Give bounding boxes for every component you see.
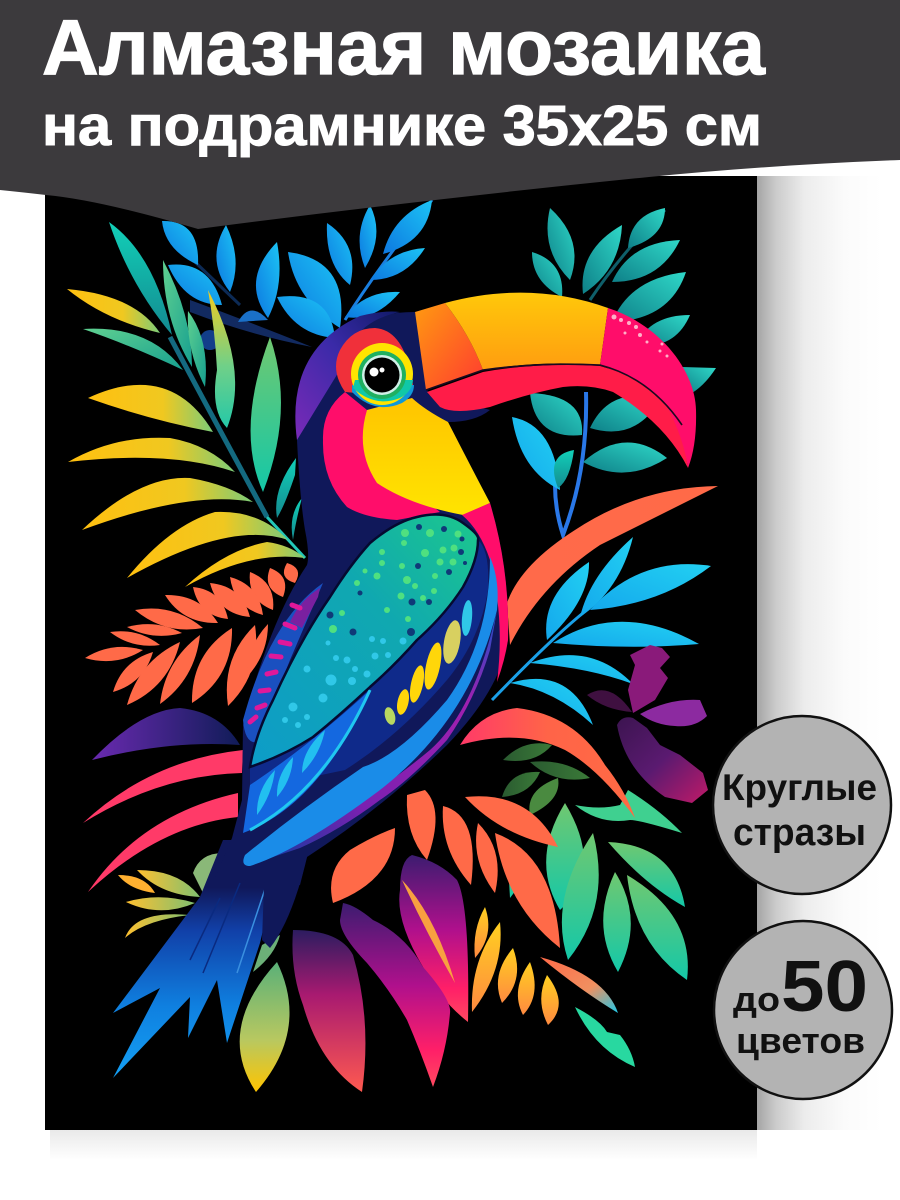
eye teal lower xyxy=(353,380,413,401)
tail slits xyxy=(190,883,267,973)
beak orange segment xyxy=(415,303,483,390)
dark magenta leaves right xyxy=(587,645,708,803)
subtitle: на подрамнике 35х25 см xyxy=(42,94,762,158)
beak yellow segment xyxy=(445,293,608,370)
eye pupil xyxy=(364,358,400,392)
beak xyxy=(415,293,696,468)
badge: up to 50 colours xyxy=(714,921,892,1099)
banner shape xyxy=(0,0,900,229)
yellow wing spots xyxy=(383,600,474,726)
beak dots xyxy=(612,314,668,358)
eye green ring xyxy=(358,351,406,399)
canvas black background xyxy=(45,176,757,1130)
badge text line 1: Круглые xyxy=(722,767,877,808)
lower wing feathers xyxy=(243,690,370,833)
blue frond right xyxy=(492,537,711,725)
top-left blue leaves xyxy=(162,200,432,350)
bird body xyxy=(215,312,508,885)
yellow chest xyxy=(363,398,490,515)
top-left tropical frond xyxy=(67,222,305,587)
head purple edge xyxy=(295,312,400,440)
title: Алмазная мозаика xyxy=(42,3,766,91)
teal wing xyxy=(250,515,478,767)
wing dots xyxy=(282,524,467,728)
tail dark piece xyxy=(262,857,307,948)
eye xyxy=(336,328,414,407)
badge: round rhinestones xyxy=(713,716,891,894)
lower mandible xyxy=(427,365,688,468)
pink collar xyxy=(323,392,440,520)
belly purple xyxy=(270,610,497,858)
badge text colours: цветов xyxy=(736,1020,865,1061)
toucan xyxy=(113,293,696,1078)
pink throat xyxy=(462,503,508,682)
bottom-left small frond xyxy=(118,853,280,972)
canvas painting xyxy=(45,176,757,1130)
eye red patch xyxy=(336,328,413,395)
navy under beak xyxy=(405,395,490,422)
leaves under the beak xyxy=(512,367,716,535)
beak pink tip xyxy=(600,308,696,468)
bottom leaves xyxy=(240,855,468,1092)
badge number 50: 50 xyxy=(781,947,868,1027)
right lower green leaves xyxy=(502,743,688,980)
header banner xyxy=(0,0,900,229)
lower-left large leaves xyxy=(83,708,243,892)
beak line xyxy=(426,364,682,425)
coral leaves under bird xyxy=(331,708,635,948)
yellow lower frond xyxy=(472,907,635,1067)
canvas shadow xyxy=(50,176,882,1160)
eye blue lower ring xyxy=(352,385,414,407)
dark wing panel xyxy=(250,540,488,790)
eye yellow ring xyxy=(351,343,413,405)
badge text do: до xyxy=(733,981,780,1019)
coral leaf right xyxy=(507,486,718,645)
top-right teal leaves xyxy=(532,208,690,346)
coral left frond xyxy=(85,563,298,706)
badge text line 2: стразы xyxy=(733,812,866,854)
left magenta feathers strip xyxy=(243,583,323,742)
blue belly band xyxy=(243,557,498,866)
tail feathers xyxy=(113,840,290,1078)
